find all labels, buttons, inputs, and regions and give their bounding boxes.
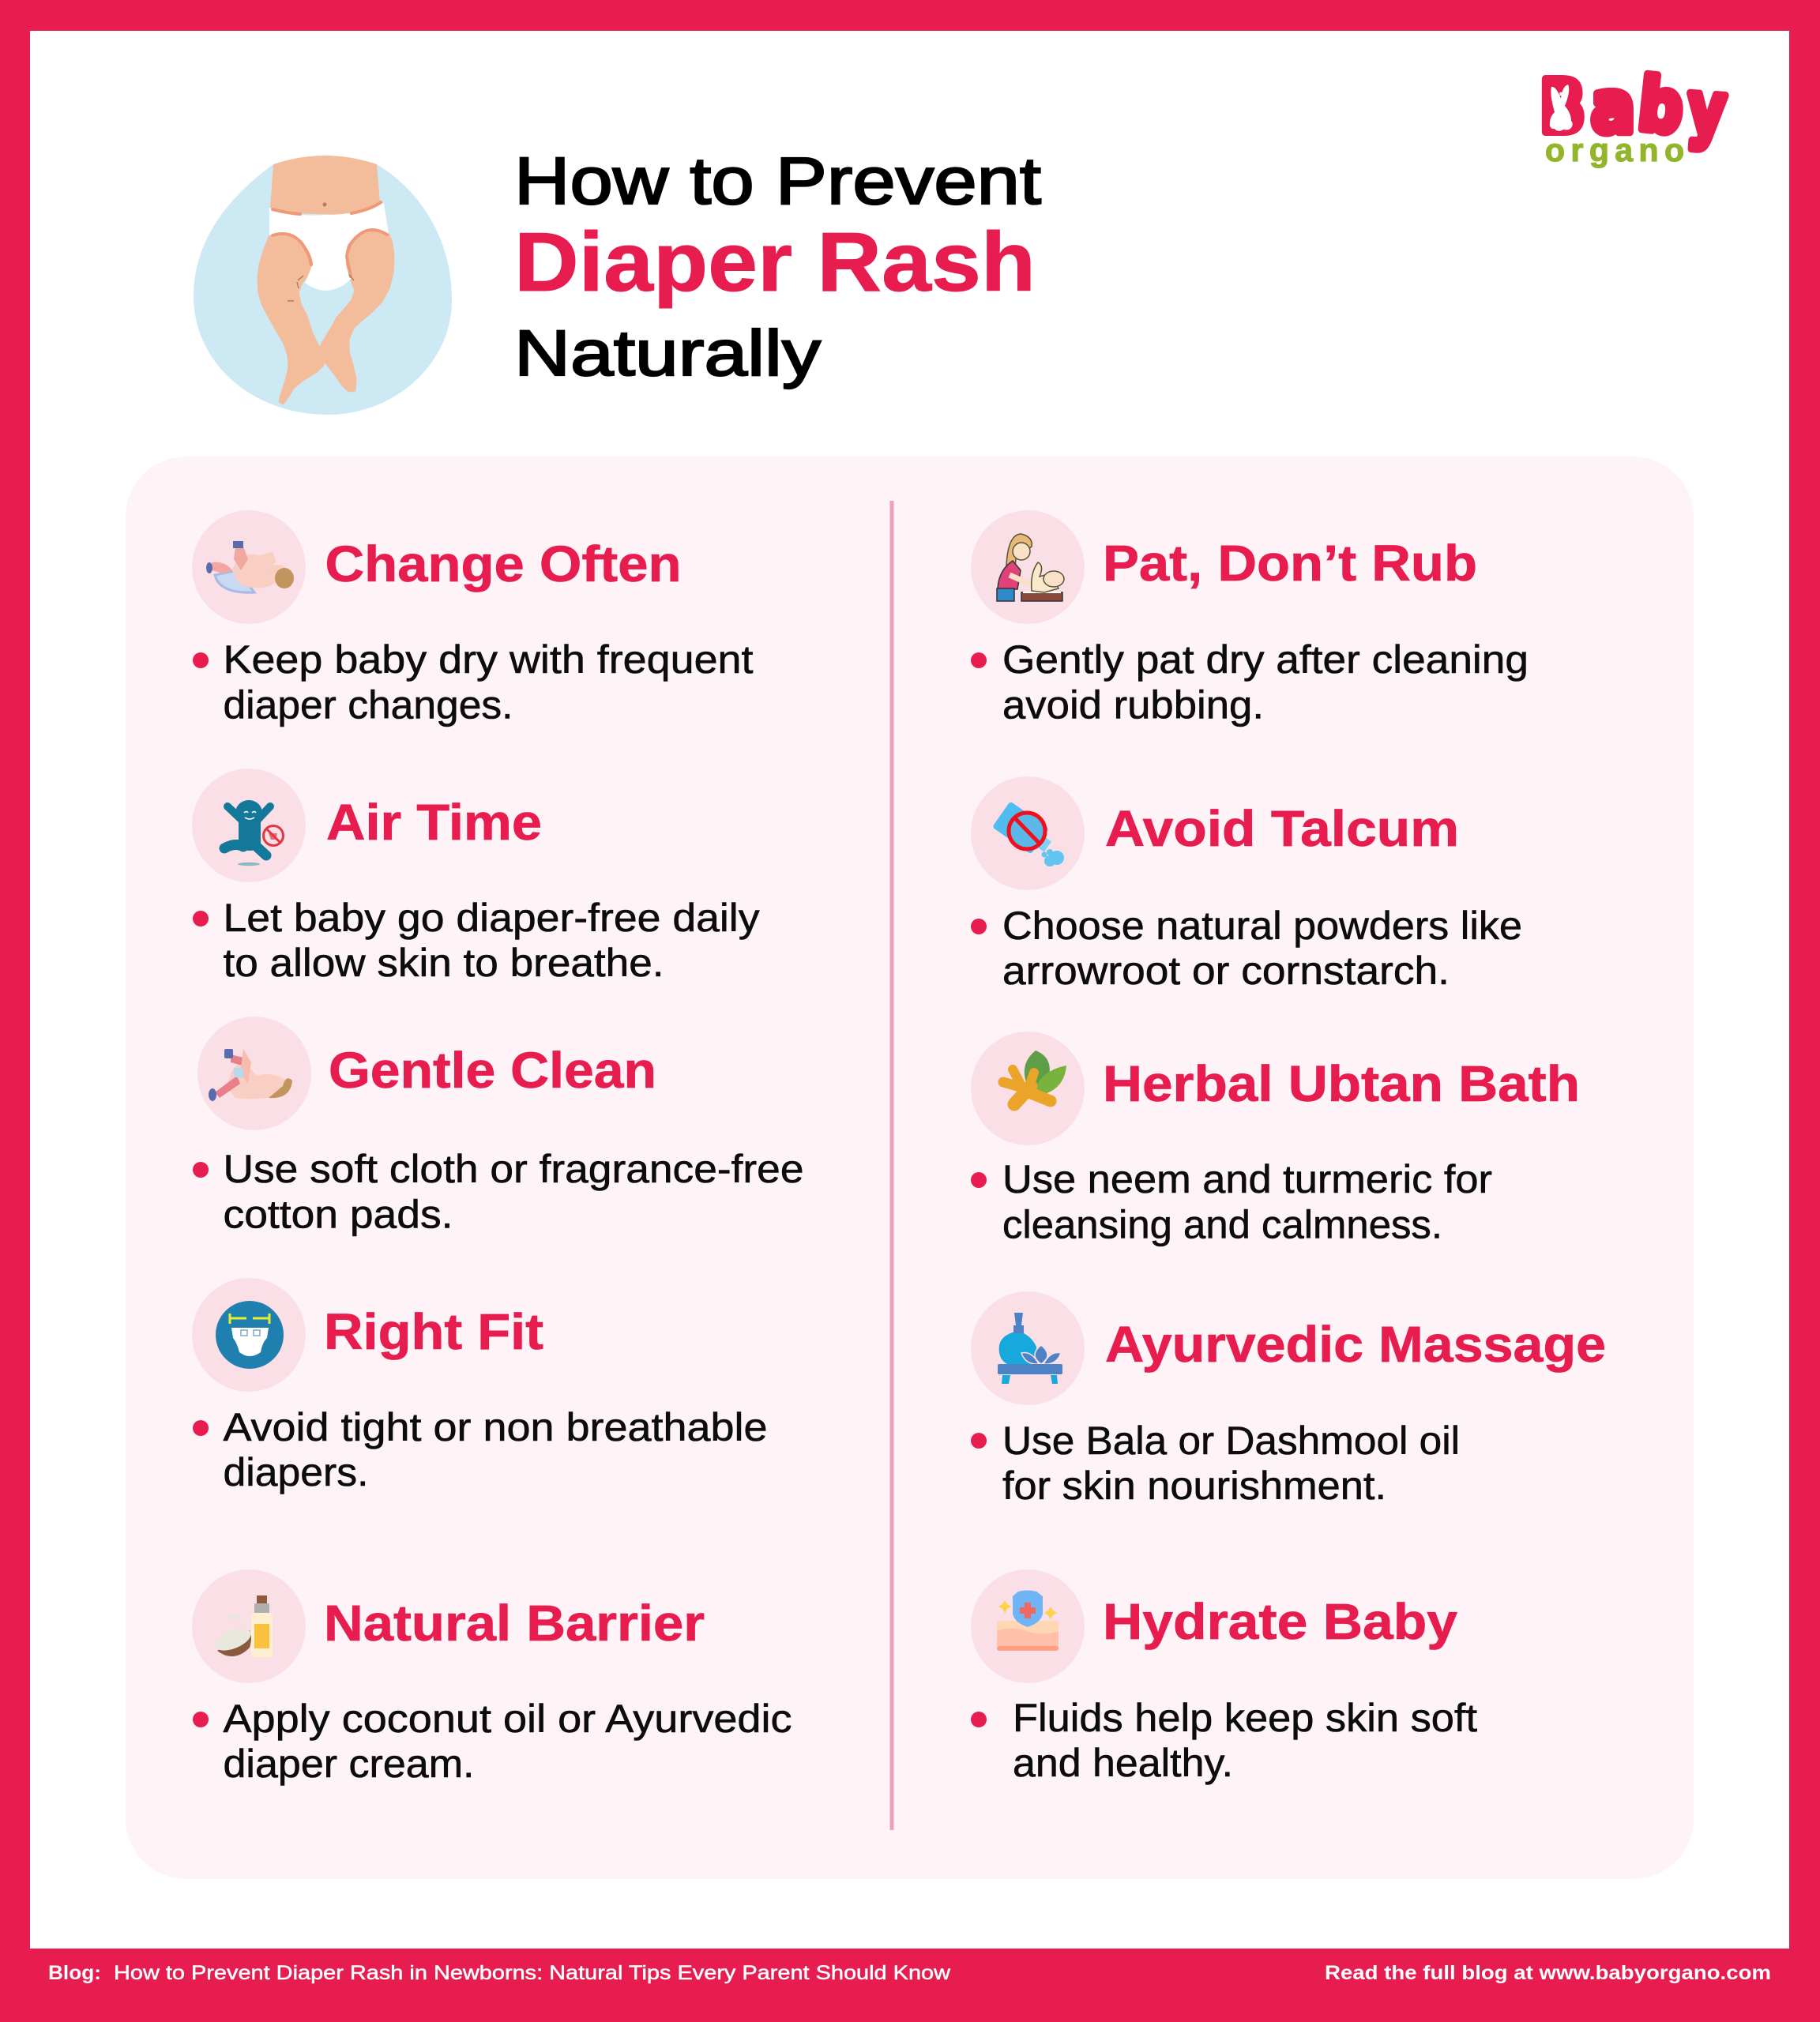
title: How to Prevent [514, 144, 1041, 218]
text [223, 1697, 792, 1786]
text [223, 896, 760, 985]
icon: cleaning baby [197, 1017, 311, 1130]
text: Choose natural powders like [1002, 904, 1522, 948]
bullet [971, 1172, 987, 1188]
tip: pat don't rub [971, 510, 1529, 727]
bullet [971, 919, 987, 934]
text: Avoid tight or non breathable [223, 1405, 768, 1449]
heading: Avoid Talcum [1105, 800, 1459, 857]
icon: herbal compress and lotus [971, 1291, 1085, 1405]
bullet [193, 911, 209, 926]
text: cleansing and calmness. [1002, 1202, 1442, 1246]
footer: website link: Read the full blog at www.babyorgano.com [1325, 1962, 1771, 1984]
text: diapers. [223, 1450, 368, 1494]
text [1002, 904, 1522, 993]
title: Naturally [514, 318, 821, 389]
text: cotton pads. [223, 1193, 453, 1237]
text: Use soft cloth or fragrance-free [223, 1147, 804, 1191]
tip: hydrate baby [971, 1569, 1477, 1785]
text: and healthy. [1013, 1741, 1233, 1785]
brand logo [1540, 62, 1728, 168]
brand logo: y [1685, 66, 1728, 152]
tip: gentle clean [193, 1017, 804, 1237]
brand logo: a [1591, 65, 1635, 149]
bullet [971, 1712, 987, 1727]
text [223, 1147, 804, 1237]
title: Diaper Rash [514, 216, 1036, 309]
text [1002, 1419, 1460, 1508]
heading: Ayurvedic Massage [1105, 1316, 1606, 1373]
tip: air time [192, 769, 760, 985]
footer: blog title: Blog: [48, 1962, 101, 1984]
text: Apply coconut oil or Ayurvedic [223, 1697, 792, 1741]
text [223, 637, 754, 727]
heading: Natural Barrier [324, 1595, 705, 1652]
brand logo: B [1540, 65, 1585, 149]
heading: Right Fit [324, 1303, 543, 1360]
text: arrowroot or cornstarch. [1002, 949, 1450, 993]
text: Let baby go diaper-free daily [223, 896, 760, 940]
text: diaper cream. [223, 1742, 474, 1786]
icon: skin and shield [971, 1569, 1085, 1683]
brand logo: b [1634, 62, 1687, 150]
icon: talc prohibited [971, 776, 1085, 890]
heading: Air Time [326, 794, 542, 851]
bullet [193, 652, 209, 668]
icon: mother patting baby [971, 510, 1085, 624]
icon: coconut and oil [192, 1569, 306, 1683]
tip: ayurvedic massage [971, 1291, 1606, 1508]
text: avoid rubbing. [1002, 682, 1264, 727]
text: Keep baby dry with frequent [223, 637, 754, 682]
icon: running baby [192, 769, 306, 882]
bullet [193, 1420, 209, 1436]
tip: change often [192, 510, 754, 727]
tip: avoid talcum [971, 776, 1522, 993]
footer: blog title: How to Prevent Diaper Rash in Newborns: Natural Tips Every Parent Should Know [114, 1962, 951, 1984]
text [1002, 1157, 1492, 1246]
bullet [971, 1433, 987, 1449]
tip: right fit [192, 1278, 768, 1494]
text [1013, 1696, 1477, 1785]
icon: fitted diaper [192, 1278, 306, 1392]
heading: Gentle Clean [329, 1042, 656, 1099]
tip: herbal ubtan bath [971, 1032, 1580, 1246]
brand logo: organo [1545, 132, 1684, 168]
heading: Herbal Ubtan Bath [1103, 1055, 1580, 1112]
panel: tips [126, 457, 1694, 1879]
icon: diaper change [192, 510, 306, 624]
bullet [193, 1162, 209, 1178]
tip: natural barrier [192, 1569, 792, 1786]
bullet [971, 652, 987, 668]
heading: Hydrate Baby [1103, 1593, 1457, 1650]
text: diaper changes. [223, 682, 513, 727]
text: for skin nourishment. [1002, 1464, 1386, 1508]
text: Use neem and turmeric for [1002, 1157, 1492, 1201]
heading: Pat, Don’t Rub [1103, 535, 1477, 592]
illustration: baby legs in diaper with rash [194, 156, 452, 415]
text: to allow skin to breathe. [223, 941, 664, 985]
text: Fluids help keep skin soft [1013, 1696, 1477, 1740]
text [1002, 637, 1529, 727]
bullet [193, 1712, 209, 1727]
text [223, 1405, 768, 1494]
text: Use Bala or Dashmool oil [1002, 1419, 1460, 1463]
heading: Change Often [325, 536, 681, 592]
text: Gently pat dry after cleaning [1002, 637, 1529, 682]
icon: turmeric and leaves [971, 1032, 1085, 1145]
title [514, 144, 1041, 389]
